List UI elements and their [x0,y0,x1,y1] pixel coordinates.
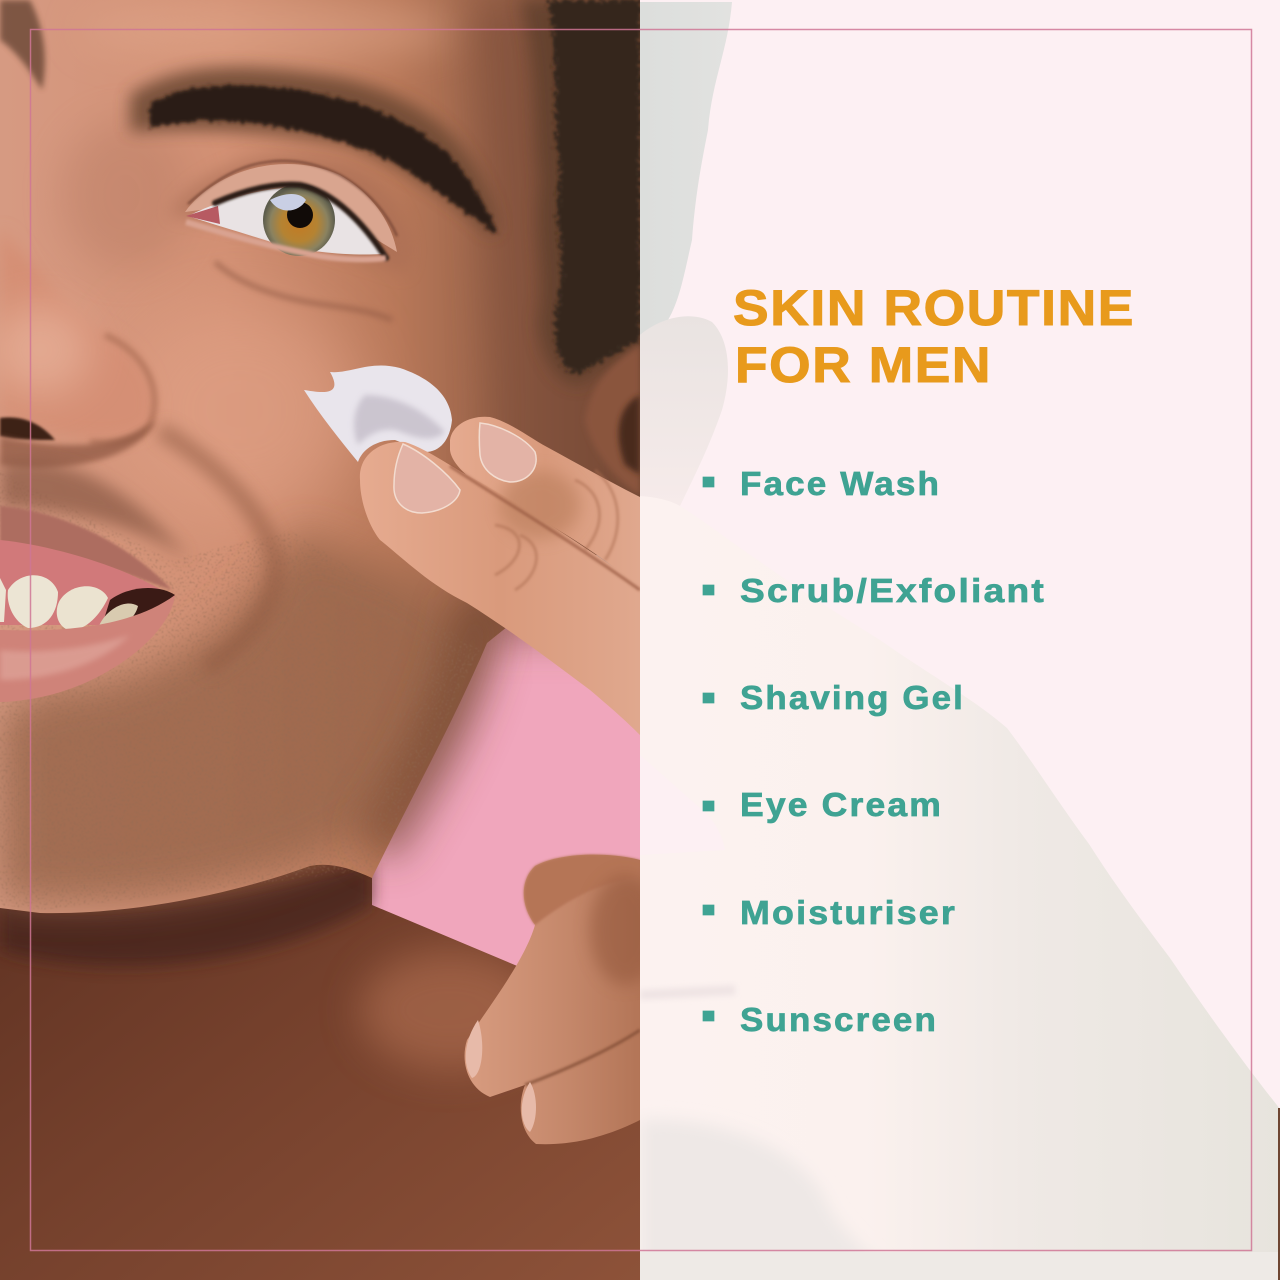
lower hand fingers [465,855,660,1144]
title line 2: FOR MEN [735,337,992,393]
hair: sideburn and temple [548,0,640,374]
pink background [372,628,640,966]
ghost ear [640,316,728,506]
upper finger [450,417,640,590]
lower finger [360,442,640,735]
title line 1: SKIN ROUTINE [733,280,1135,336]
item: scrub: Scrub/Exfoliant [740,572,1046,609]
dark jaw edge under fingers [375,600,480,850]
smile crease [160,430,276,668]
cream shading [354,395,445,445]
knuckle tone [500,471,580,539]
lower lip highlight [0,635,130,680]
left eyebrow [0,0,45,90]
mouth [0,506,175,702]
inner eye shadow [69,132,179,258]
stubble texture [0,470,480,910]
brow core [150,85,497,234]
nose [0,230,155,468]
hand silhouette [465,855,640,1144]
gap between fingers [450,466,640,590]
eye [170,156,410,320]
panel background [640,0,1280,1280]
eyelid crease [188,161,397,236]
ghost hair [640,2,732,335]
item: shaving gel: Shaving Gel [740,679,965,716]
ghost hand [640,496,1280,1280]
nostril [0,417,55,440]
right panel with faded photo [640,0,1280,1280]
tooth 2 [57,586,108,630]
lower nail [394,444,460,513]
ear [585,345,640,495]
item: sunscreen: Sunscreen [740,1001,938,1038]
title [733,280,1135,393]
eye white [188,188,382,255]
knuckle shadow [590,875,660,985]
right photo sliver [1278,1108,1280,1280]
first finger knuckle [524,855,640,925]
lower knuckle wrinkles [495,525,536,590]
upper lip stubble [0,461,190,560]
eye reflection [270,194,306,211]
gums [0,540,165,625]
lower lid [186,222,386,259]
upper lash line [215,185,386,258]
upper eyelid [185,164,397,252]
fingernail 2 [466,1020,482,1078]
hair soft edge [520,0,640,385]
nose wing edge [90,335,154,443]
pupil [287,202,313,228]
cream on cheek [304,366,452,462]
ghost bottom band [640,1252,1280,1280]
cheek warm tone [163,304,366,514]
tooth 1 [8,575,58,628]
pointing fingers [360,417,640,735]
upper nail [479,423,536,482]
face skin [0,0,640,913]
lower lip [0,595,175,702]
item: moisturiser: Moisturiser [740,894,957,931]
cream blob [304,366,452,462]
item: face wash: Face Wash [740,465,941,502]
fingernail 3 [522,1082,536,1132]
ghost finger shadow [640,985,735,1000]
ear shadow [619,395,640,475]
inner corner [186,206,220,224]
brow soft edge [130,68,496,235]
iris [263,184,335,256]
nose highlight [0,305,90,395]
item: eye cream: Eye Cream [740,786,943,823]
jaw and beard tone [0,530,480,903]
eye socket shadow [175,154,400,262]
ghost lower shadow [640,1120,900,1280]
shadow under jaw [0,860,372,966]
crease between fingers [525,1030,640,1085]
tooth 3 [98,603,138,630]
forehead highlight [139,0,454,64]
right eyebrow [130,68,497,235]
neck and shoulder [0,864,640,1280]
nose body [2,246,148,430]
routine list [703,465,1046,1038]
upper lip [0,506,172,590]
side of face shadow [470,0,640,640]
upper knuckle wrinkles [575,470,618,560]
tooth 0 [0,578,6,622]
under-eye crease [215,262,392,320]
photo: man applying cream to his cheek [0,0,660,1280]
shoulder highlight [360,950,540,1070]
mouth interior [100,588,175,632]
shadow under nose [0,420,155,468]
